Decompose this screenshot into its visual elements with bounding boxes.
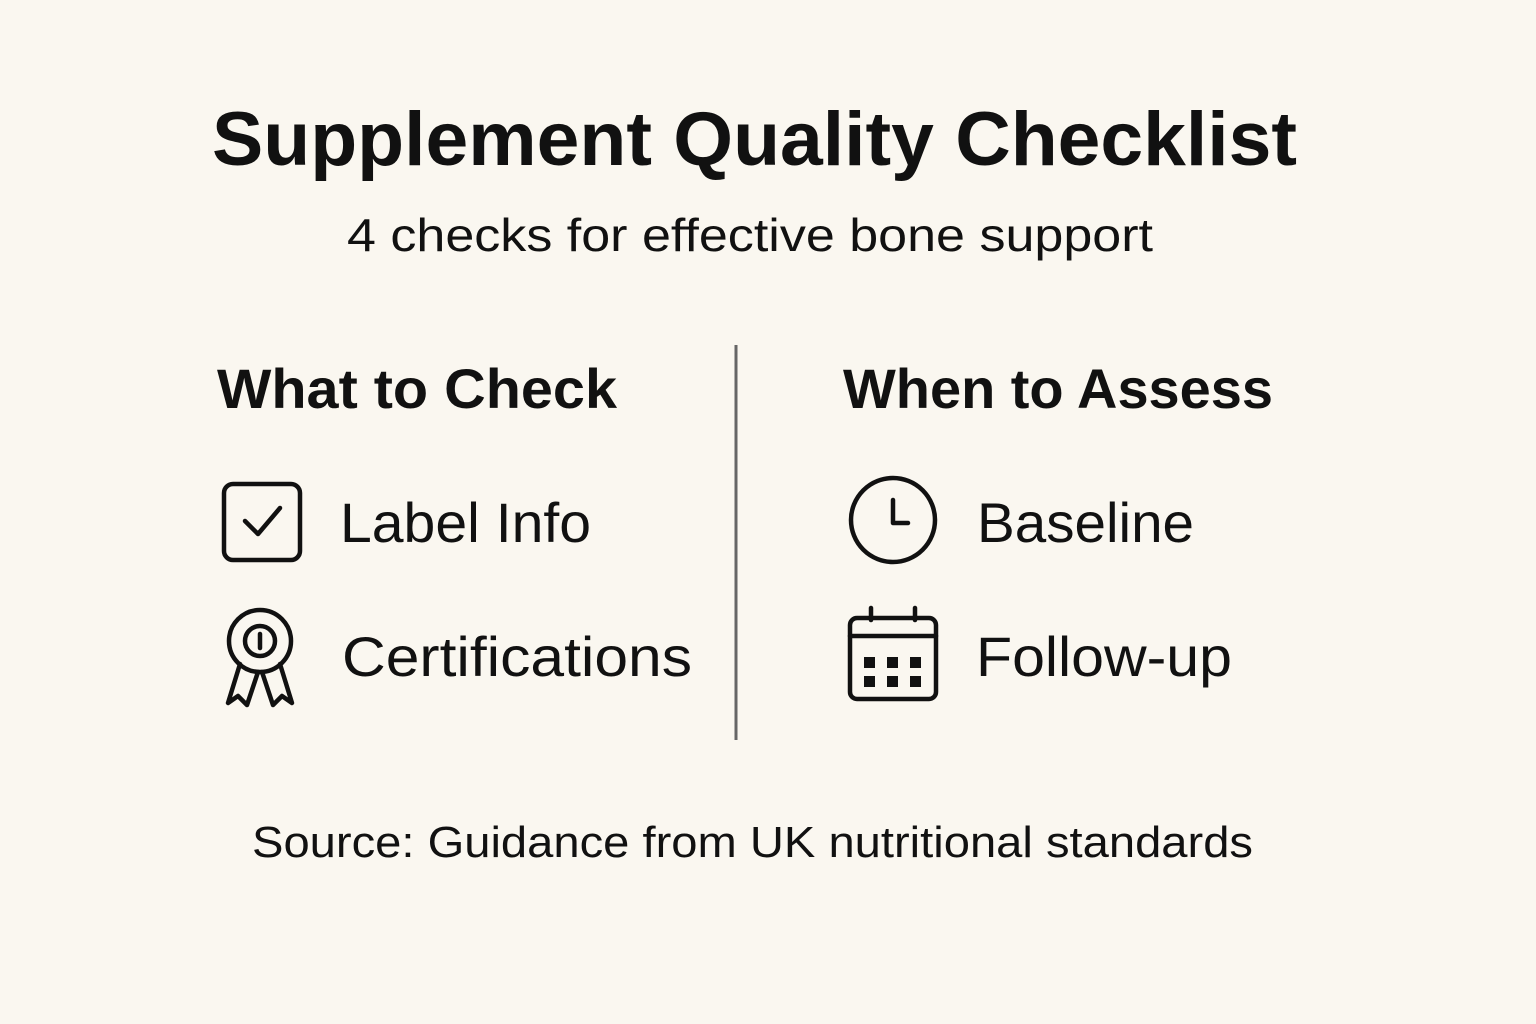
source note: Source: Guidance from UK nutritional standards (252, 818, 1253, 867)
heading: What to Check: What to Check (217, 357, 618, 420)
subtitle: 4 checks for effective bone support (347, 209, 1153, 261)
title: Supplement Quality Checklist (212, 97, 1297, 182)
icon: calendar (850, 608, 936, 699)
icon: checkbox (224, 484, 300, 560)
icon: award ribbon (228, 610, 292, 705)
panel: when to assess (843, 357, 1273, 699)
item: Follow-up: Follow-up (976, 625, 1232, 688)
icon: clock (851, 478, 935, 562)
item: Baseline: Baseline (977, 491, 1194, 554)
item: Certifications: Certifications (342, 625, 692, 688)
panel: what to check (217, 357, 692, 705)
heading: When to Assess: When to Assess (843, 357, 1273, 420)
item: Label Info: Label Info (340, 491, 591, 554)
